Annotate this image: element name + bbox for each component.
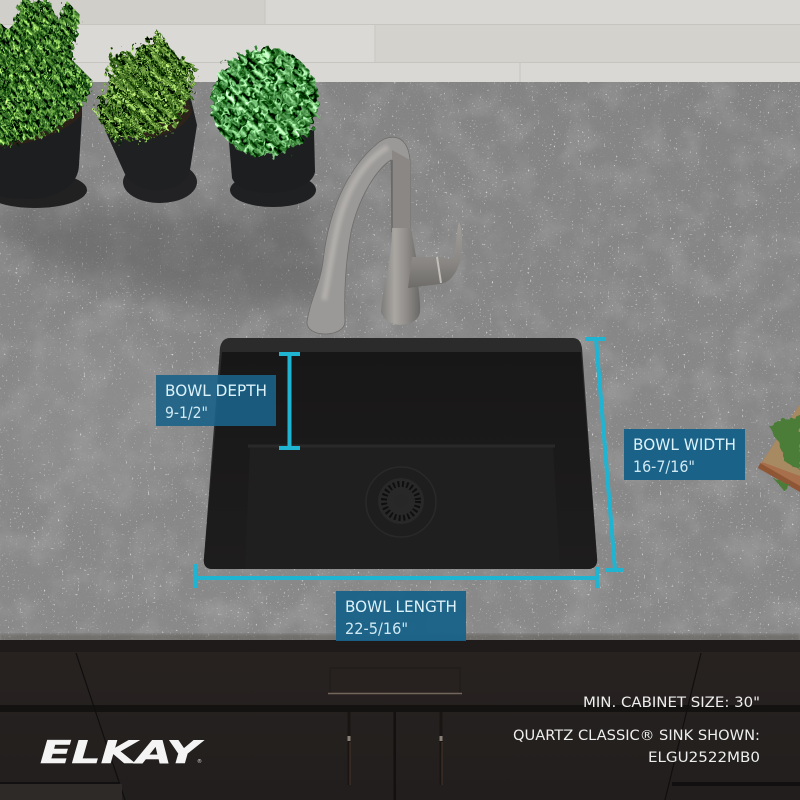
text: cabinet size and model: MIN. CABINET SIZE: 30" — [583, 695, 760, 711]
sink basin — [204, 338, 597, 569]
background: wood plank floor — [0, 0, 800, 84]
callout: bowl depth: BOWL DEPTH — [165, 381, 267, 400]
wooden cutting board with herbs — [758, 404, 800, 492]
callout: bowl depth — [156, 375, 276, 426]
callout: bowl length: BOWL LENGTH — [345, 597, 457, 616]
callout: bowl width — [624, 429, 745, 480]
callout: bowl width: BOWL WIDTH — [633, 435, 736, 454]
drain — [366, 467, 436, 537]
drawer handle — [328, 668, 462, 694]
logo: Elkay: ® — [197, 758, 202, 765]
text: cabinet size and model — [513, 695, 760, 766]
logo: Elkay: ELKAY — [40, 735, 205, 771]
faucet — [307, 137, 462, 334]
logo: Elkay — [40, 735, 205, 771]
plant: rosemary in black pot — [0, 0, 92, 208]
dimension line: bowl length — [193, 564, 599, 588]
callout: bowl length — [336, 591, 466, 641]
dimension line: bowl depth — [279, 352, 300, 450]
callout: bowl length: 22-5/16" — [345, 619, 408, 638]
door handles — [349, 712, 442, 785]
countertop — [0, 82, 800, 642]
text: cabinet size and model: QUARTZ CLASSIC® SINK SHOWN: — [513, 728, 760, 744]
dimension line: bowl width — [585, 339, 624, 570]
plant: leafy herb in black pot — [95, 32, 197, 203]
text: cabinet size and model: ELGU2522MB0 — [648, 750, 760, 766]
faucet handle — [408, 222, 462, 288]
cabinet base — [0, 640, 800, 800]
plant: ivy ball in black pot — [211, 48, 319, 207]
callout: bowl depth: 9-1/2" — [165, 403, 208, 422]
callout: bowl width: 16-7/16" — [633, 457, 695, 476]
